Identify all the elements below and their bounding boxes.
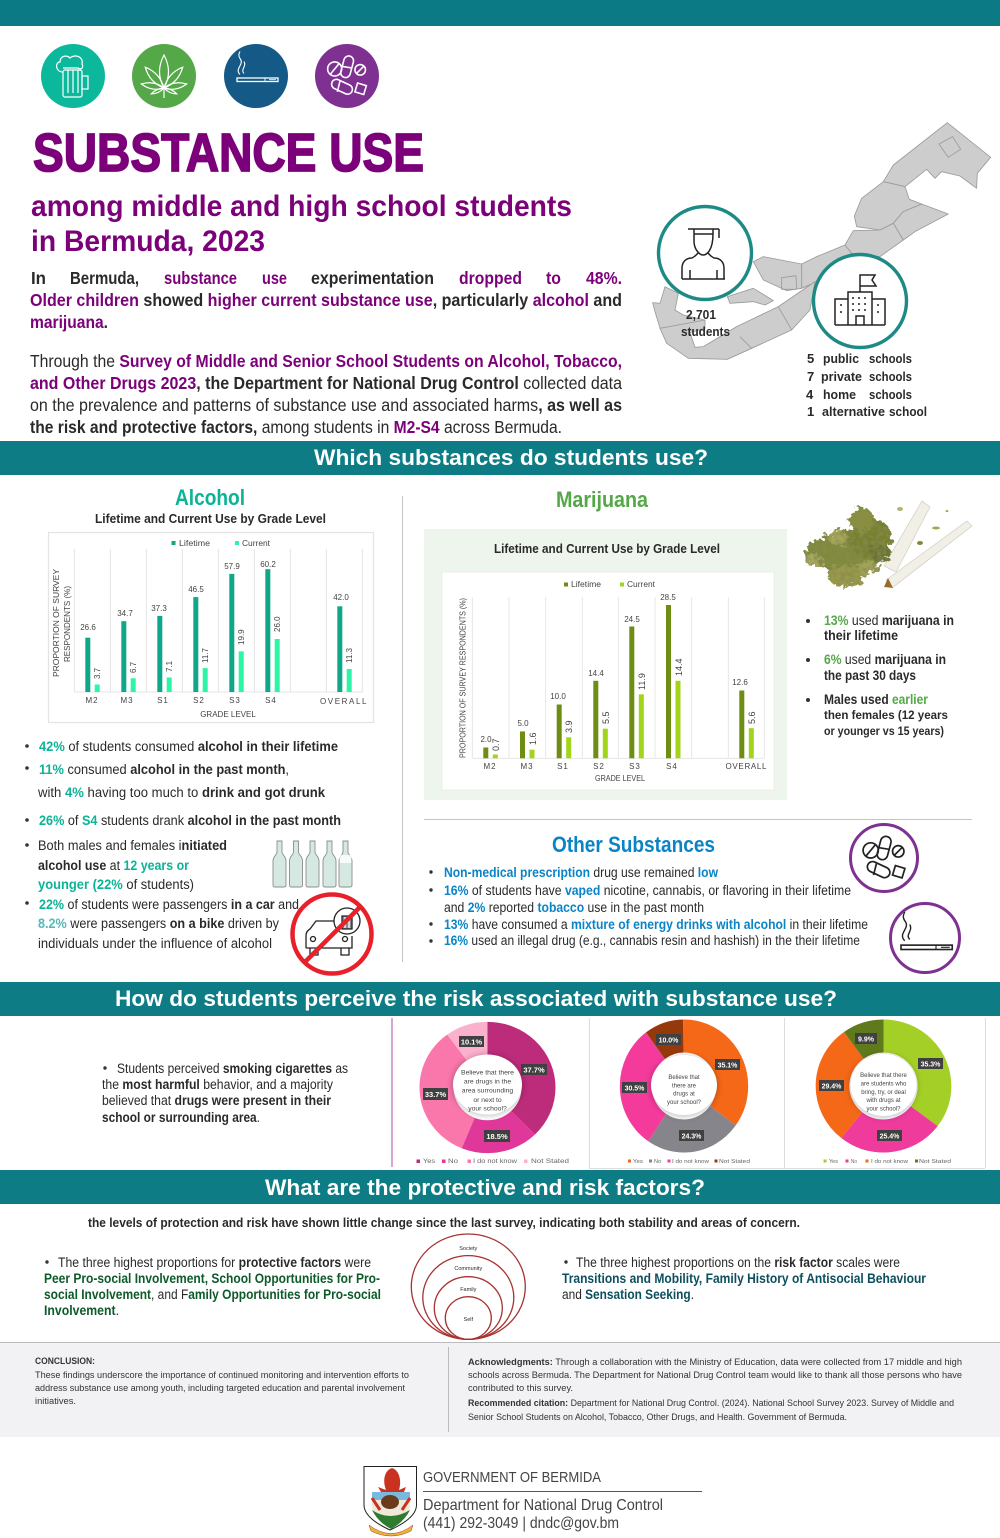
intro paragraph 1: In <box>31 268 46 288</box>
department text: (441) 292-3049 | dndc@gov.bm <box>423 1515 619 1532</box>
donut chart: drugs at school: 10.0% <box>659 1038 679 1044</box>
donut chart: drugs near school: or next to <box>473 1097 502 1104</box>
donut chart: students with drugs at school: are students who <box>861 1082 907 1088</box>
panel: alcohol <box>25 485 373 974</box>
title: SUBSTANCE USE <box>33 123 424 183</box>
donut chart: students with drugs at school: Yes <box>829 1159 839 1165</box>
marijuana bar chart: Current <box>627 580 656 589</box>
donut chart: students with drugs at school: Believe that there <box>860 1073 908 1079</box>
alcohol bar chart: 11.3 <box>345 647 354 663</box>
protective factors text: The three highest proportions for protective factors were <box>58 1255 371 1270</box>
school counts: schools <box>869 369 912 384</box>
school counts: alternative <box>822 404 885 419</box>
alcohol bar chart <box>48 532 374 722</box>
alcohol bar chart: Lifetime <box>179 539 211 548</box>
donut chart: students with drugs at school: Not Stated <box>919 1159 951 1165</box>
marijuana bar chart: 5.6 <box>747 711 757 724</box>
marijuana bar chart: 1.6 <box>528 732 538 745</box>
other substances bullets: 13% have consumed a mixture of energy drinks with alcohol in their lifetime <box>444 917 868 932</box>
footer panel <box>0 1342 1000 1437</box>
donut chart: drugs near school: 33.7% <box>425 1090 446 1099</box>
donut chart: drugs at school: Yes <box>633 1159 644 1165</box>
marijuana bar chart: 28.5 <box>660 593 676 602</box>
donut chart: students with drugs at school: with drugs at <box>865 1098 901 1104</box>
alcohol bar chart: S1 <box>157 696 169 705</box>
icon: cannabis leaf <box>132 44 196 108</box>
protective factors text: Involvement. <box>44 1303 119 1318</box>
donut chart: drugs near school: Believe that there <box>461 1070 514 1076</box>
risk factors text <box>562 1255 927 1302</box>
risk factors text: The three highest proportions on the risk factor scales were <box>576 1255 900 1270</box>
concentric social-ecological diagram: Society <box>459 1246 478 1252</box>
alcohol heading: Alcohol <box>175 485 245 510</box>
marijuana bar chart: PROPORTION OF SURVEY RESPONDENTS (%) <box>458 598 468 758</box>
government logo and contact <box>364 1466 702 1536</box>
alcohol bar chart: RESPONDENTS (%) <box>63 586 72 662</box>
marijuana bar chart: 12.6 <box>732 678 748 687</box>
school counts: schools <box>869 351 912 366</box>
marijuana bar chart: 14.4 <box>674 658 684 676</box>
intro paragraph 1: use <box>262 268 287 288</box>
other substances bullets: Non-medical prescription drug use remained low <box>444 865 718 880</box>
alcohol bar chart: 26.6 <box>80 623 96 632</box>
subtitle <box>31 190 572 258</box>
donut chart: students with drugs at school: 35.3% <box>921 1062 941 1068</box>
protective factors text: Peer Pro-social Involvement, School Opportunities for Pro- <box>44 1271 380 1286</box>
alcohol bar chart: 57.9 <box>224 562 240 571</box>
icon: pills <box>315 44 379 108</box>
marijuana bar chart: 3.9 <box>564 720 574 733</box>
donut chart: drugs near school: Yes <box>423 1159 435 1165</box>
conclusion: These findings underscore the importance of continued monitoring and intervention efforts to <box>35 1370 409 1381</box>
school counts: 1 <box>807 404 814 419</box>
icon: cigarette <box>224 44 288 108</box>
marijuana bar chart: Lifetime and Current Use by Grade Level <box>494 541 720 556</box>
alcohol bar chart: 34.7 <box>117 609 133 618</box>
marijuana bullet points: 13% used marijuana in <box>824 613 954 628</box>
other substances bullets: 16% of students have vaped nicotine, cannabis, or flavoring in their lifetime <box>444 883 851 898</box>
school counts: public <box>823 351 859 366</box>
subtitle: in Bermuda, 2023 <box>31 225 265 258</box>
alcohol bar chart: M3 <box>120 696 134 705</box>
icon: pills circle <box>850 824 918 892</box>
donut chart: drugs at school: No <box>654 1159 661 1165</box>
alcohol bar chart: 11.7 <box>201 647 210 663</box>
school counts: school <box>889 404 927 419</box>
alcohol bullet points: 8.2% were passengers on a bike driven by <box>38 916 279 931</box>
intro paragraph 1: Bermuda, <box>70 268 139 288</box>
image: cannabis buds and joints <box>805 501 972 588</box>
student count: 2,701 <box>686 307 716 322</box>
intro paragraph 2: Through the Survey of Middle and Senior School Students on Alcohol, Tobacco, <box>30 351 622 371</box>
marijuana bar chart: 24.5 <box>624 615 640 624</box>
donut chart: students with drugs at school: 25.4% <box>880 1134 900 1140</box>
risk factors text: and Sensation Seeking. <box>562 1287 694 1302</box>
section header: risk perception <box>0 982 1000 1016</box>
alcohol bullet points: 22% of students were passengers in a car and <box>39 897 299 912</box>
other substances bullets <box>429 865 868 948</box>
conclusion: address substance use among youth, including targeted education and parental involvement <box>35 1383 405 1394</box>
intro paragraph 1: 48%. <box>586 268 622 288</box>
intro paragraph 1: marijuana. <box>30 312 108 332</box>
donut chart: students with drugs at school: I do not know <box>871 1159 908 1165</box>
donut chart: drugs at school: 24.3% <box>682 1134 702 1140</box>
alcohol bullet points: with 4% having too much to drink and got drunk <box>37 785 325 800</box>
protective factors text: social Involvement, and Family Opportunities for Pro-social <box>44 1287 381 1302</box>
donut chart: drugs at school: there are <box>672 1084 697 1090</box>
alcohol bar chart: OVERALL <box>320 697 368 706</box>
marijuana bar chart: S1 <box>557 762 569 771</box>
panel frames <box>589 1018 986 1168</box>
recommended citation <box>468 1398 954 1423</box>
donut chart: drugs at school: I do not know <box>672 1159 709 1165</box>
donut chart: drugs near school <box>416 1036 569 1165</box>
donut chart: drugs near school: Not Stated <box>531 1159 569 1165</box>
alcohol bullet points: individuals under the influence of alcohol <box>38 936 272 951</box>
concentric social-ecological diagram: Self <box>464 1317 474 1323</box>
donut chart: drugs at school: 35.1% <box>718 1062 738 1070</box>
intro paragraph 1 <box>30 268 622 332</box>
alcohol bar chart: 7.1 <box>165 660 174 672</box>
donut chart: students with drugs at school: bring, try, or deal <box>861 1090 906 1096</box>
risk factors text: Transitions and Mobility, Family History of Antisocial Behaviour <box>562 1271 927 1286</box>
other substances bullets: 16% used an illegal drug (e.g., cannabis resin and hashish) in the their lifetime <box>444 933 860 948</box>
intro paragraph 2: on the prevalence and patterns of substance use and associated harms, as well as <box>30 395 622 415</box>
school counts <box>806 351 927 419</box>
map of Bermuda <box>653 123 991 359</box>
acknowledgments: contributed to this survey. <box>468 1383 573 1394</box>
alcohol bar chart: 46.5 <box>188 585 204 594</box>
alcohol bar chart: S4 <box>265 696 277 705</box>
marijuana bullet points: their lifetime <box>824 628 898 643</box>
marijuana bullet points <box>806 613 954 738</box>
marijuana bullet points: 6% used marijuana in <box>824 652 946 667</box>
alcohol bullet points <box>25 739 341 951</box>
school counts: private <box>821 369 862 384</box>
icon: no drink driving sign <box>292 894 372 974</box>
alcohol bullet points: 42% of students consumed alcohol in their lifetime <box>39 739 338 754</box>
concentric social-ecological diagram: Family <box>460 1287 477 1293</box>
school counts: 7 <box>807 369 814 384</box>
marijuana bar chart: 11.9 <box>637 673 647 690</box>
marijuana bar chart: S4 <box>666 762 678 771</box>
section header: protective and risk factors <box>0 1170 1000 1204</box>
alcohol bar chart: Current <box>242 539 271 548</box>
intro paragraph 1: to <box>546 268 561 288</box>
alcohol bar chart: 37.3 <box>151 604 167 613</box>
school counts: 4 <box>806 387 814 402</box>
recommended citation: Senior School Students on Alcohol, Tobacco, Other Drugs, and Health. Government of Bermuda. <box>468 1412 847 1423</box>
marijuana bar chart: M2 <box>483 762 497 771</box>
alcohol bar chart: GRADE LEVEL <box>200 710 256 719</box>
factors summary line: the levels of protection and risk have shown little change since the last survey, indicating both stability and areas of concern. <box>88 1215 800 1230</box>
risk perception text <box>102 1061 348 1125</box>
donut chart: drugs near school: No <box>448 1159 459 1165</box>
Bermuda map with statistics <box>653 123 991 419</box>
marijuana bar chart: 5.0 <box>517 719 529 728</box>
alcohol bar chart: 60.2 <box>260 560 276 569</box>
panel: marijuana <box>424 487 972 800</box>
intro paragraph 1: experimentation <box>311 268 434 288</box>
concentric social-ecological diagram <box>411 1234 525 1339</box>
department text: GOVERNMENT OF BERMIDA <box>423 1469 601 1486</box>
marijuana bar chart: 5.5 <box>601 711 611 724</box>
icon: coat of arms <box>364 1466 416 1536</box>
intro paragraph 2: and Other Drugs 2023, the Department for National Drug Control collected data <box>30 373 622 393</box>
marijuana bar chart: Lifetime <box>571 580 602 589</box>
conclusion <box>35 1356 409 1407</box>
marijuana bar chart: 10.0 <box>550 692 566 701</box>
intro paragraph 1: Older children showed higher current substance use, particularly alcohol and <box>30 290 622 310</box>
marijuana bullet points: the past 30 days <box>824 668 916 683</box>
subtitle: among middle and high school students <box>31 190 572 223</box>
marijuana bar chart: 0.7 <box>491 738 501 751</box>
donut chart: drugs at school: Believe that <box>668 1075 700 1081</box>
donut chart: drugs at school <box>622 1034 750 1165</box>
donut chart: drugs at school: Not Stated <box>719 1159 750 1165</box>
marijuana bar chart: OVERALL <box>726 762 767 771</box>
intro paragraph 2 <box>30 351 622 437</box>
other substances bullets: and 2% reported tobacco use in the past month <box>444 900 704 915</box>
conclusion: initiatives. <box>35 1396 76 1407</box>
alcohol bar chart: S2 <box>193 696 205 705</box>
other substances heading: Other Substances <box>552 832 715 857</box>
intro paragraph 1: substance <box>164 268 237 288</box>
donut chart: students with drugs at school: No <box>851 1159 857 1165</box>
alcohol bar chart: M2 <box>85 696 99 705</box>
marijuana bar chart: S3 <box>629 762 641 771</box>
acknowledgments: schools across Bermuda. The Department for National Drug Control team would like to thank all those persons who have <box>468 1370 962 1381</box>
donut chart: drugs at school: your school? <box>667 1100 702 1106</box>
icon: bottles <box>273 841 352 887</box>
risk perception text: Students perceived smoking cigarettes as <box>117 1061 348 1076</box>
alcohol chart subtitle: Lifetime and Current Use by Grade Level <box>95 511 326 526</box>
panel: other substances <box>429 824 960 972</box>
concentric social-ecological diagram: Community <box>454 1266 482 1272</box>
donut chart: students with drugs at school: your school? <box>866 1106 901 1112</box>
school counts: schools <box>869 387 912 402</box>
alcohol bar chart: 42.0 <box>333 593 349 602</box>
donut chart: drugs near school: 18.5% <box>486 1132 508 1141</box>
alcohol bar chart: 3.7 <box>93 667 102 679</box>
vertical divider <box>402 496 404 962</box>
donut panel dividers <box>391 1018 393 1167</box>
marijuana bullet points: or younger vs 15 years) <box>824 724 944 738</box>
alcohol bullet points: 26% of S4 students drank alcohol in the past month <box>39 813 341 828</box>
alcohol bar chart: PROPORTION OF SURVEY <box>52 568 61 677</box>
department text: Department for National Drug Control <box>423 1497 663 1514</box>
intro paragraph 2: the risk and protective factors, among students in M2-S4 across Bermuda. <box>30 417 562 437</box>
marijuana bar chart: S2 <box>593 762 605 771</box>
donut chart: drugs near school: are drugs in the <box>464 1078 511 1086</box>
marijuana bar chart: GRADE LEVEL <box>595 774 645 783</box>
marijuana bullet points: then females (12 years <box>824 708 948 722</box>
acknowledgments <box>468 1357 962 1394</box>
icon: cigarette circle <box>890 904 960 972</box>
risk perception text: believed that drugs were present in their <box>102 1093 332 1108</box>
section header: which substances <box>0 441 1000 475</box>
section header: which substances: Which substances do students use? <box>314 445 708 470</box>
alcohol bullet points: 11% consumed alcohol in the past month, <box>39 762 289 777</box>
student count <box>681 307 730 339</box>
donut chart: drugs near school: I do not know <box>473 1159 518 1165</box>
donut chart: drugs at school: 30.5% <box>625 1086 645 1092</box>
marijuana heading: Marijuana <box>556 487 649 512</box>
icon: student circle <box>658 206 752 300</box>
donut chart: drugs near school: area surrounding <box>462 1088 513 1094</box>
alcohol bar chart: 26.0 <box>273 616 282 632</box>
school counts: home <box>823 387 856 402</box>
department text <box>423 1469 702 1532</box>
alcohol bar chart: 6.7 <box>129 661 138 673</box>
substance icons row <box>41 44 379 108</box>
donut chart: students with drugs at school <box>819 1033 951 1165</box>
conclusion: CONCLUSION: <box>35 1356 95 1367</box>
intro paragraph 1: dropped <box>459 268 522 288</box>
icon: school circle <box>814 254 906 348</box>
marijuana bar chart: M3 <box>520 762 534 771</box>
alcohol bar chart: S3 <box>229 696 241 705</box>
marijuana bar chart: 2.0 <box>480 735 492 744</box>
marijuana bar chart: 14.4 <box>588 669 604 678</box>
donut chart: students with drugs at school: 29.4% <box>822 1084 842 1090</box>
horizontal divider <box>424 818 972 820</box>
acknowledgments: Acknowledgments: Through a collaboration with the Ministry of Education, data were collected from 17 middle and high <box>468 1357 962 1368</box>
student count: students <box>681 324 730 339</box>
donut chart: students with drugs at school: 9.9% <box>858 1036 875 1044</box>
alcohol bar chart: 19.9 <box>237 629 246 645</box>
icon: beer <box>41 44 105 108</box>
recommended citation: Recommended citation: Department for National Drug Control. (2024). National School Survey 2023. Survey of Middle and <box>468 1398 954 1409</box>
donut chart: drugs near school: 10.1% <box>461 1038 482 1046</box>
donut chart: drugs at school: drugs at <box>673 1092 695 1098</box>
marijuana bar chart <box>424 529 787 800</box>
donut chart: drugs near school: your school? <box>468 1106 507 1112</box>
risk perception text: school or surrounding area. <box>102 1110 260 1125</box>
top banner <box>0 0 1000 26</box>
protective factors text <box>44 1255 381 1318</box>
school counts: 5 <box>807 351 814 366</box>
alcohol bullet points: alcohol use at 12 years or <box>38 858 190 873</box>
donut chart: drugs near school: 37.7% <box>523 1066 545 1074</box>
risk perception text: the most harmful behavior, and a majority <box>102 1077 333 1092</box>
marijuana bullet points: Males used earlier <box>824 692 929 707</box>
section header: protective and risk factors: What are the protective and risk factors? <box>265 1175 705 1200</box>
section header: risk perception: How do students perceive the risk associated with substance use? <box>115 986 837 1011</box>
alcohol bullet points: Both males and females initiated <box>38 838 227 853</box>
alcohol bullet points: younger (22% of students) <box>38 877 194 892</box>
